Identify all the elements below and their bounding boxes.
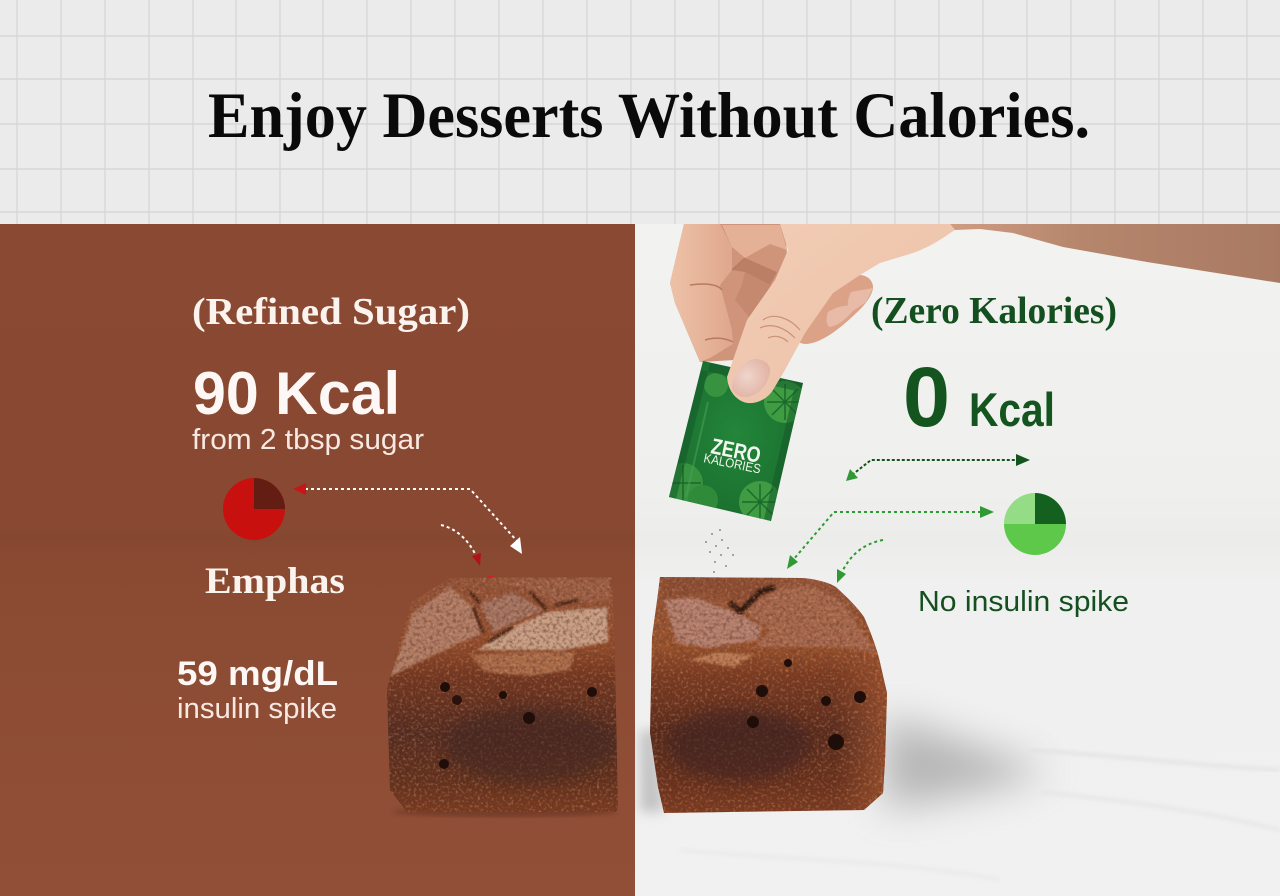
stat unit: Kcal: Kcal xyxy=(969,383,1055,436)
fist base xyxy=(670,224,790,362)
arrow: pie to left brownie xyxy=(293,483,522,554)
knuckle creases xyxy=(760,316,800,342)
arrow: pie to right brownie xyxy=(787,506,994,569)
curled fingers behind xyxy=(793,275,873,344)
caption: no insulin spike: No insulin spike xyxy=(918,586,1129,618)
finger fold xyxy=(722,225,787,258)
sachet label: ZERO xyxy=(709,433,763,468)
falling powder xyxy=(705,529,734,573)
stat: 0: 0 xyxy=(903,350,950,444)
heading: zero kalories: (Zero Kalories) xyxy=(871,290,1117,332)
sachet sublabel: KALORIES xyxy=(702,450,763,477)
stat: 59 mg/dL: 59 mg/dL xyxy=(177,655,338,693)
caption: from 2 tbsp sugar: from 2 tbsp sugar xyxy=(192,424,424,456)
stat: 90 Kcal: 90 Kcal xyxy=(193,360,400,427)
thumbnail xyxy=(732,359,770,397)
index finger xyxy=(670,224,733,362)
label: Emphas: Emphas xyxy=(205,561,345,602)
fingernails xyxy=(827,288,873,327)
illustration: right brownie xyxy=(650,577,887,813)
pie chart: refined sugar xyxy=(223,478,285,540)
heading: refined sugar: (Refined Sugar) xyxy=(192,291,470,333)
arm xyxy=(950,224,1280,283)
panel: zero calories background xyxy=(635,224,1280,896)
pie chart: zero calories xyxy=(1004,493,1066,555)
sachet xyxy=(663,361,806,523)
panel: refined sugar background xyxy=(0,224,635,896)
thumb and palm xyxy=(727,224,955,403)
arrow: curved green to brownie xyxy=(837,540,883,583)
illustration: left brownie xyxy=(380,570,625,820)
arrow: curved red to brownie xyxy=(441,525,494,587)
illustration: arm, hand and sachet xyxy=(663,224,1280,523)
caption: insulin spike: insulin spike xyxy=(177,693,337,725)
arrow: double-headed green xyxy=(846,454,1030,481)
header background with grid xyxy=(0,0,1280,224)
title: Enjoy Desserts Without Calories. xyxy=(208,80,1090,152)
